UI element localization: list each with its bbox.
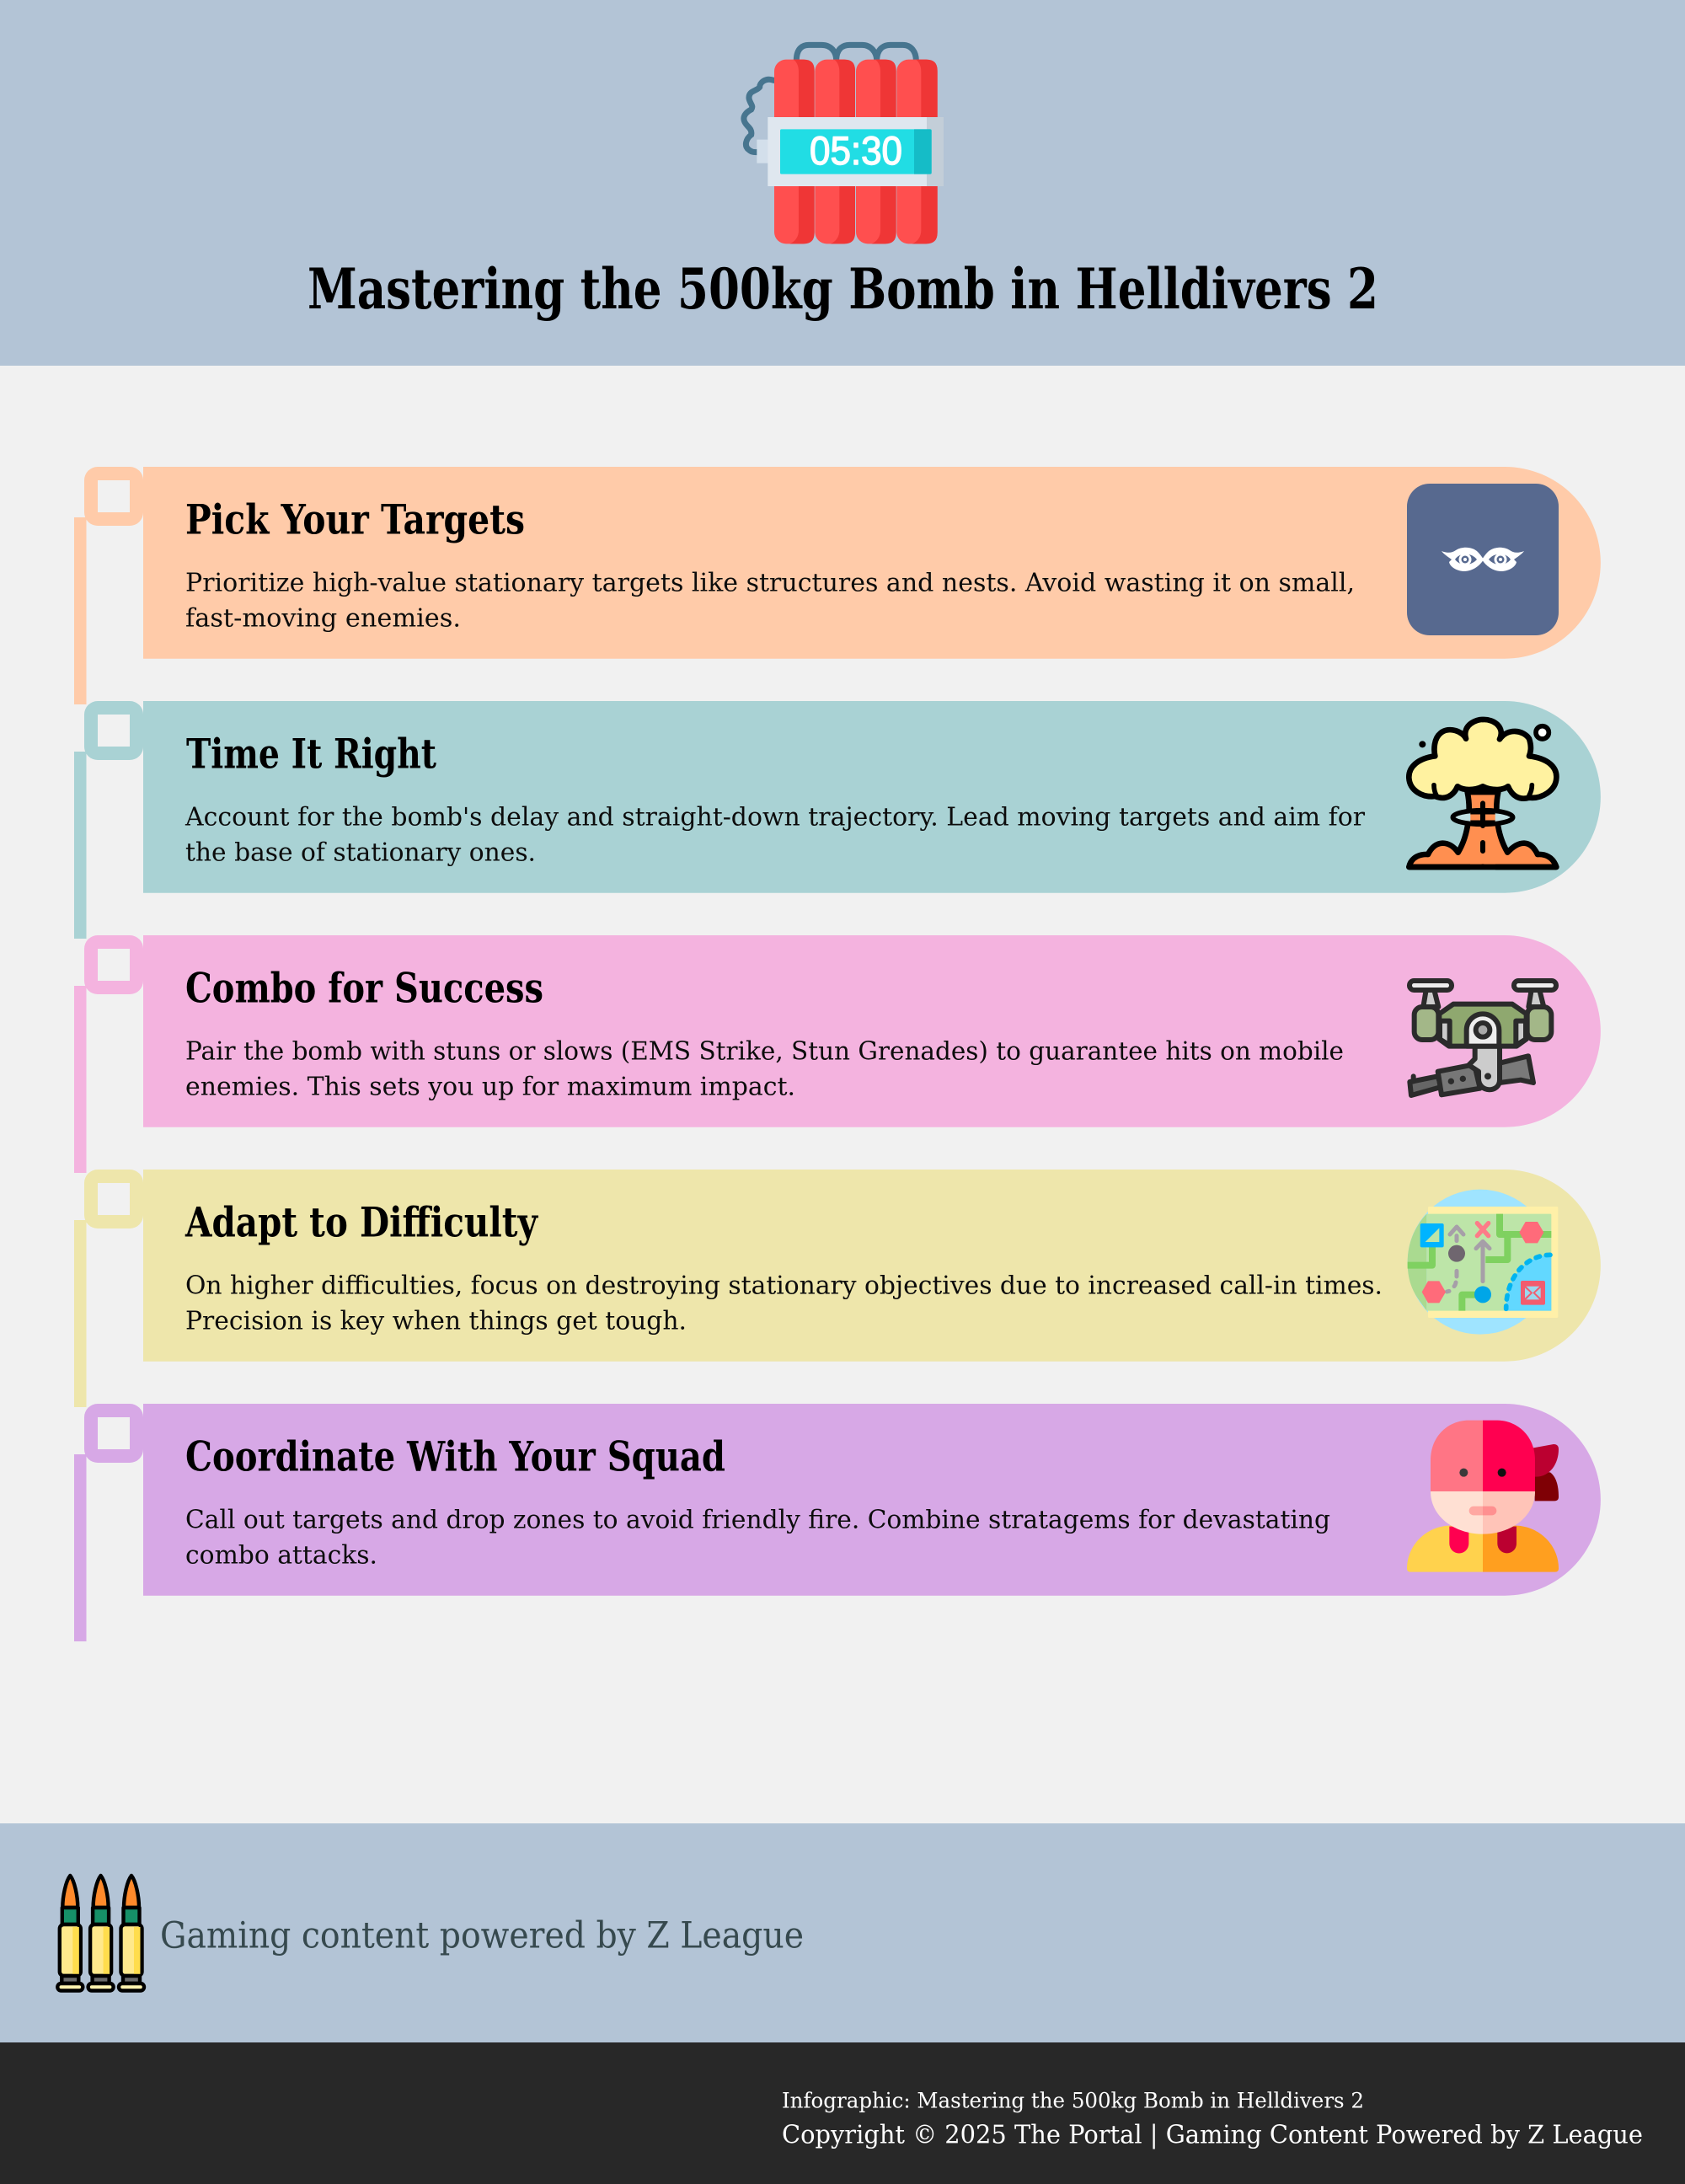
panel: adapt to difficulty: [74, 1170, 1601, 1407]
header band: [0, 0, 1685, 366]
body text: time it right: Account for the bomb's delay and straight-down trajectory. Lead moving targets and aim for: [185, 803, 1366, 832]
icon: watching eyes: [1407, 484, 1559, 635]
body text: coordinate with your squad: Call out targets and drop zones to avoid friendly fire. Combine stratagems for devastating: [185, 1506, 1330, 1535]
heading: time it right: Time It Right: [186, 730, 436, 779]
body text: time it right: [185, 803, 1366, 867]
panel: coordinate with your squad: [74, 1404, 1601, 1641]
body text: combo for success: enemies. This sets you up for maximum impact.: [185, 1072, 795, 1101]
panel: combo for success: [74, 935, 1601, 1173]
heading: coordinate with your squad: Coordinate With Your Squad: [185, 1432, 725, 1481]
footer band: powered by: [0, 1823, 1685, 2042]
body text: pick your targets: Prioritize high-value stationary targets like structures and nests. Avoid wasting it on small,: [185, 569, 1355, 598]
body text: adapt to difficulty: On higher difficulties, focus on destroying stationary objectives due to increased call-in times.: [185, 1271, 1383, 1301]
body text: combo for success: Pair the bomb with stuns or slows (EMS Strike, Stun Grenades) to guarantee hits on mobile: [185, 1037, 1344, 1067]
footer band: copyright: [0, 2042, 1685, 2184]
text: copyright: Copyright © 2025 The Portal | Gaming Content Powered by Z League: [782, 2120, 1643, 2149]
text: gaming content powered by: Gaming content powered by Z League: [160, 1914, 804, 1956]
icon: three bullets: [57, 1876, 144, 1990]
heading: pick your targets: Pick Your Targets: [185, 495, 525, 544]
heading: adapt to difficulty: Adapt to Difficulty: [185, 1198, 539, 1247]
panel: pick your targets: [74, 467, 1601, 704]
icon: armed drone: [1410, 981, 1556, 1095]
heading: combo for success: Combo for Success: [185, 964, 543, 1013]
body text: pick your targets: fast-moving enemies.: [185, 603, 461, 633]
body text: pick your targets: [185, 569, 1355, 633]
panel: time it right: [74, 701, 1601, 939]
icon: dynamite bomb with timer: [744, 45, 944, 244]
icon: soldier with bandana: [1407, 1421, 1559, 1572]
icon: mushroom cloud: [1409, 720, 1556, 870]
body text: time it right: the base of stationary ones.: [185, 838, 536, 867]
body text: combo for success: [185, 1037, 1344, 1101]
icon: tactical map: [1408, 1190, 1558, 1335]
body text: adapt to difficulty: [185, 1271, 1383, 1336]
body text: coordinate with your squad: combo attacks.: [185, 1540, 377, 1570]
title: Mastering the 500kg Bomb in Helldivers 2: [308, 256, 1378, 322]
icon: dynamite bomb with timer: 05:30: [810, 128, 902, 173]
body text: adapt to difficulty: Precision is key when things get tough.: [185, 1306, 687, 1336]
text: infographic caption: Infographic: Mastering the 500kg Bomb in Helldivers 2: [782, 2089, 1364, 2114]
body text: coordinate with your squad: [185, 1506, 1330, 1570]
